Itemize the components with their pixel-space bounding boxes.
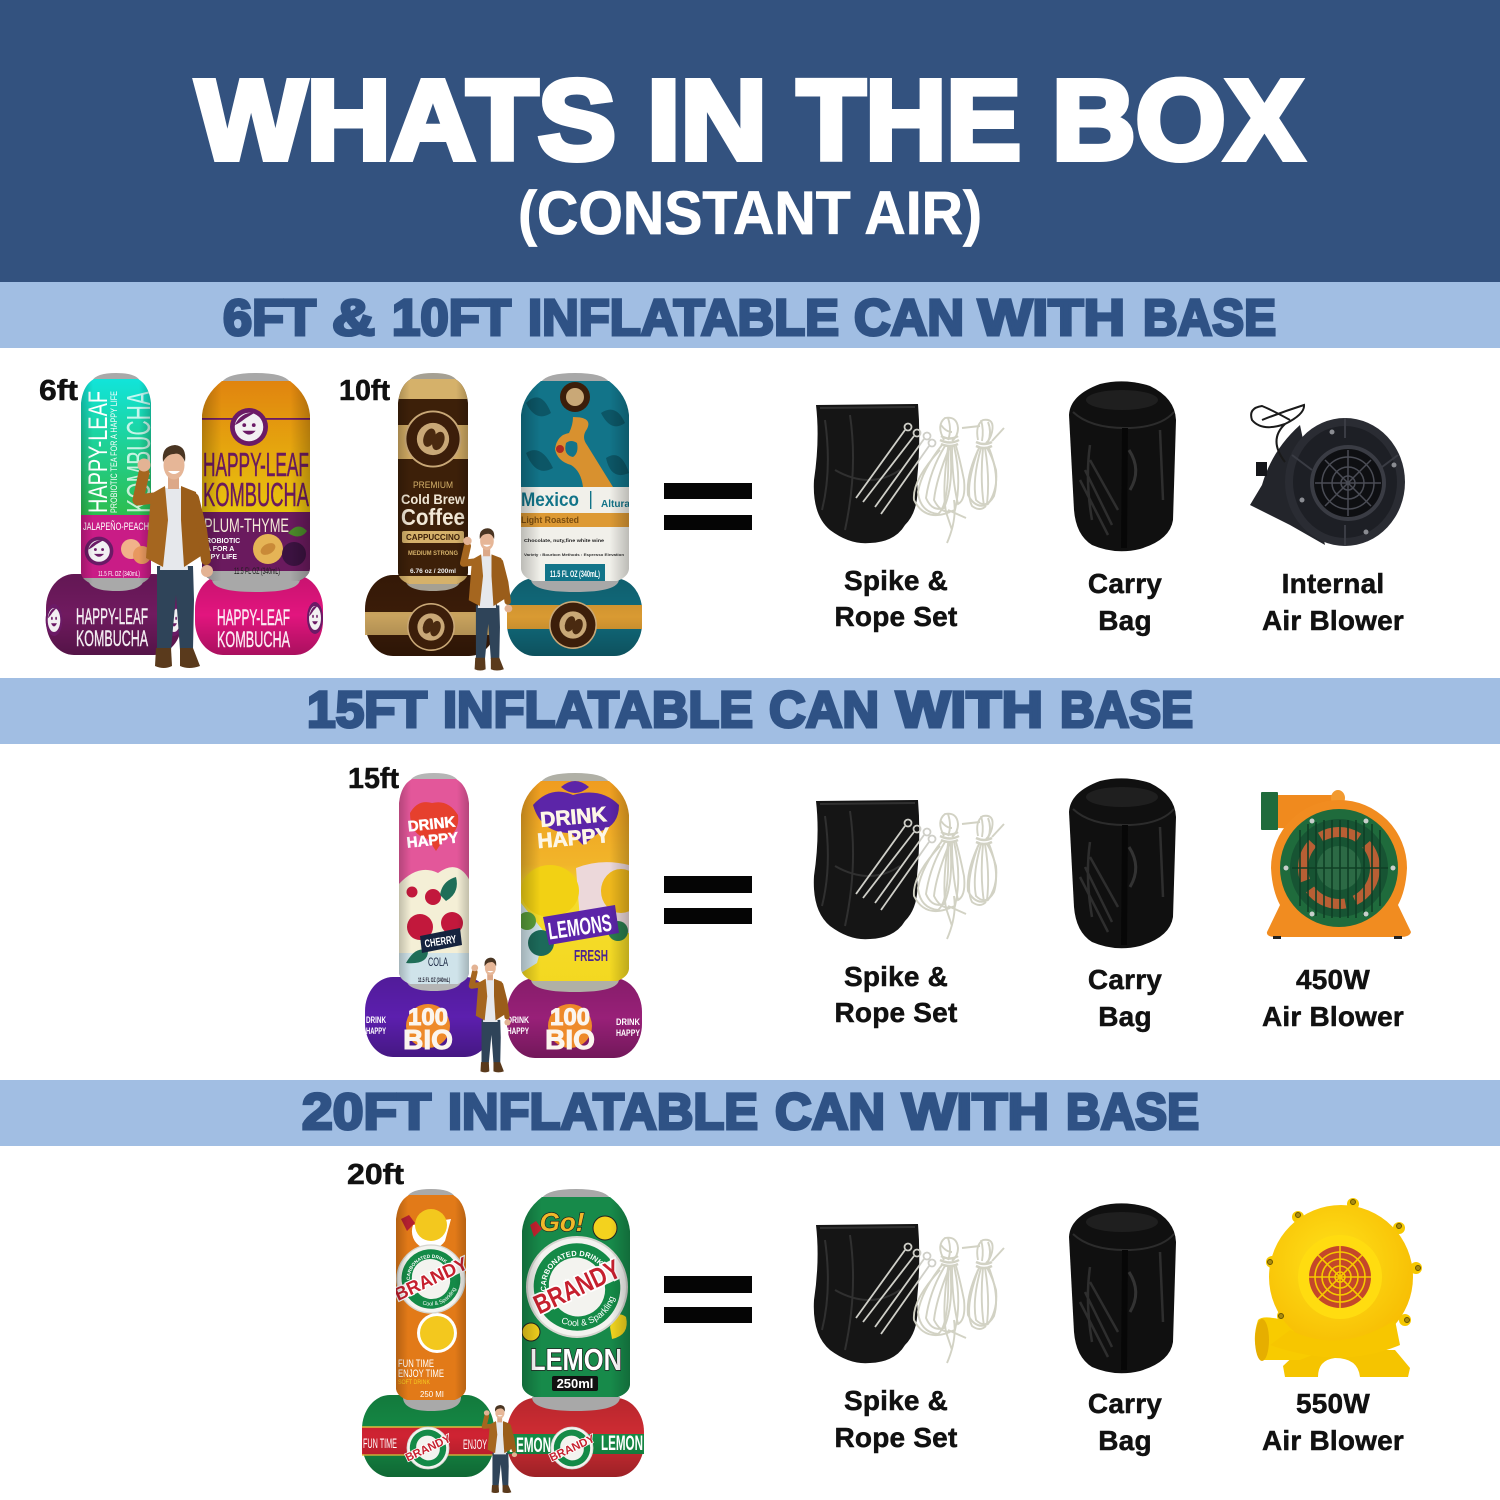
item: carry bag 2: [1069, 778, 1176, 948]
band: 20ft heading: INFLATABLE: [448, 1083, 758, 1140]
title: WHATS: [196, 57, 616, 183]
can: brandy lemon green: 250ml: [557, 1376, 593, 1391]
can: cold brew coffee: MEDIUM STRONG: [408, 550, 458, 557]
label: carry bag 3: Bag: [1098, 1425, 1152, 1456]
can: brandy lemon green: [522, 1189, 630, 1411]
title: BOX: [1052, 57, 1303, 183]
can: cold brew coffee: [397, 373, 469, 591]
can: cherry cola: [398, 773, 470, 991]
label: carry bag 1: Bag: [1098, 605, 1152, 636]
can: cold brew coffee: Coffee: [401, 504, 465, 530]
band: 6ft and 10ft heading: CAN: [854, 289, 964, 346]
title: [196, 57, 1303, 183]
can: brandy orange: BRANDY: [391, 1253, 471, 1305]
base: brown coffee: [365, 575, 497, 656]
band: 6ft and 10ft heading: BASE: [1143, 289, 1276, 346]
can: brandy orange: ENJOY TIME: [398, 1368, 444, 1380]
base: magenta 100 bio: HAPPY: [507, 1026, 529, 1036]
base: green brandy: ENJOY: [463, 1436, 487, 1452]
base: violet 100 bio: [365, 977, 493, 1057]
can: plum thyme: KOMBUCHA: [203, 476, 309, 513]
band: 15ft heading: BASE: [1060, 681, 1193, 738]
band: 15ft heading: 15FT: [307, 681, 427, 738]
label: spike and rope set 3: Rope Set: [835, 1422, 957, 1453]
band: 6ft and 10ft heading: INFLATABLE: [528, 289, 839, 346]
panel: 10ft cans: [339, 373, 642, 670]
label: internal air blower: Internal: [1282, 568, 1384, 599]
band: 20ft heading: [0, 1080, 1500, 1146]
label: 450W air blower: 450W: [1296, 964, 1370, 995]
base: magenta 100 bio: [507, 978, 642, 1058]
person: scale reference 10ft: [463, 528, 512, 670]
can: brandy lemon green: Go!: [540, 1207, 585, 1237]
can: plum thyme: PPY LIFE: [206, 554, 237, 561]
can: lemons fresh: LEMONS: [546, 910, 614, 945]
band: 15ft heading: WITH: [896, 681, 1043, 738]
item: spike and rope set 3: [814, 1224, 1004, 1363]
can: jalapeno peach: 11.5 FL OZ (340mL): [98, 569, 140, 578]
can: brandy orange: [396, 1189, 466, 1411]
can: cold brew coffee: CAPPUCCINO: [406, 533, 460, 542]
base: purple kombucha: KOMBUCHA: [76, 626, 148, 651]
can: brandy lemon green: CARBONATED DRINK: [540, 1250, 604, 1292]
can: lemons fresh: HAPPY: [536, 824, 610, 853]
band: 20ft heading: WITH: [902, 1083, 1049, 1140]
label: spike and rope set 3: Spike &: [844, 1385, 948, 1416]
can: brandy lemon green: Cool & Sparkling: [562, 1296, 616, 1326]
can: cold brew coffee: Cold Brew: [401, 491, 465, 507]
person: scale reference 15ft: [471, 958, 511, 1072]
can: cherry cola: CHERRY: [424, 934, 458, 950]
can: jalapeno peach: HAPPY-LEAF: [83, 391, 113, 513]
can: brandy lemon green: LEMON: [530, 1342, 622, 1377]
equals sign 3: [664, 1276, 752, 1323]
can: brandy orange: SOFT DRINK: [398, 1380, 430, 1386]
size label: 20ft: 20ft: [347, 1159, 404, 1191]
item: spike and rope set 2: [814, 800, 1004, 939]
band: 20ft heading: CAN: [775, 1083, 885, 1140]
base: purple kombucha: [46, 574, 182, 655]
can: brandy orange: CARBONATED DRINK: [406, 1254, 448, 1280]
band: 6ft and 10ft heading: 10FT: [392, 289, 511, 346]
label: 550W air blower: 550W: [1296, 1388, 1370, 1419]
can: cold brew coffee: PREMIUM: [413, 480, 453, 490]
band: 20ft heading: BASE: [1066, 1083, 1199, 1140]
title: THE: [797, 57, 1021, 183]
item: internal air blower: [1250, 405, 1405, 546]
can: plum thyme: 11.5 FL OZ (340mL): [234, 566, 280, 576]
base: pink kombucha: [195, 575, 323, 655]
can: cold brew coffee: 6.76 oz / 200ml: [410, 569, 456, 575]
base: magenta 100 bio: HAPPY: [616, 1028, 640, 1038]
can: cherry cola: HAPPY: [406, 829, 459, 852]
can: cherry cola: 11.5 FL OZ (340mL): [418, 978, 450, 984]
base: violet 100 bio: HAPPY: [366, 1026, 386, 1036]
base: red lemon: LEMON: [601, 1432, 643, 1455]
base: red lemon: LEMON: [509, 1434, 551, 1457]
title: IN: [647, 57, 767, 183]
base: violet 100 bio: 100: [408, 1004, 448, 1031]
base: pink kombucha: KOMBUCHA: [217, 627, 290, 652]
band: 20ft heading: 20FT: [302, 1083, 431, 1140]
base: red lemon: BRANDY: [548, 1433, 597, 1464]
label: carry bag 3: Carry: [1088, 1388, 1162, 1419]
can: lemons fresh: FRESH: [574, 948, 608, 965]
item: spike and rope set 1: [814, 404, 1004, 543]
can: lemons fresh: DRINK: [539, 803, 608, 832]
label: spike and rope set 1: Spike &: [844, 565, 948, 596]
can: jalapeno peach: PROBIOTIC TEA FOR A HAPPY LIFE: [109, 391, 119, 513]
can: mexico altura: Variety : Bourbon Methods : Espresso Elevation: [524, 552, 625, 557]
panel: 6ft cans: [39, 373, 323, 668]
can: cherry cola: COLA: [428, 955, 448, 969]
label: spike and rope set 2: Spike &: [844, 961, 948, 992]
band: 15ft heading: [0, 678, 1500, 744]
base: magenta 100 bio: 100: [550, 1004, 590, 1031]
base: magenta 100 bio: BIO: [545, 1024, 595, 1055]
base: green brandy: BRANDY: [404, 1433, 453, 1464]
can: cherry cola: DRINK: [407, 814, 456, 835]
can: jalapeno peach: JALAPEÑO-PEACH: [83, 520, 149, 533]
label: carry bag 2: Bag: [1098, 1001, 1152, 1032]
can: brandy orange: FUN TIME: [398, 1358, 434, 1370]
size label: 10ft: 10ft: [339, 375, 390, 407]
person: scale reference 20ft: [484, 1405, 517, 1493]
band: 15ft heading: CAN: [769, 681, 879, 738]
base: green brandy: [362, 1395, 494, 1477]
can: plum thyme: HAPPY-LEAF: [203, 446, 309, 483]
can: lemons fresh: 11.5 FL OZ (340mL): [549, 981, 601, 990]
item: 550W yellow air blower: [1255, 1198, 1422, 1377]
base: pink kombucha: HAPPY-LEAF: [217, 605, 290, 630]
header banner: [0, 0, 1500, 282]
can: jalapeno peach: [80, 373, 157, 591]
band: 6ft and 10ft heading: &: [332, 289, 375, 346]
can: plum thyme: ROBIOTIC: [206, 538, 240, 545]
size label: 15ft: 15ft: [348, 763, 399, 795]
can: brandy orange: 250 MI: [420, 1390, 444, 1399]
can: mexico altura: Altura: [601, 499, 630, 510]
can: jalapeno peach: KOMBUCHA: [120, 391, 157, 513]
label: carry bag 2: Carry: [1088, 964, 1162, 995]
label: carry bag 1: Carry: [1088, 568, 1162, 599]
band: 6ft and 10ft heading: WITH: [978, 289, 1125, 346]
can: brandy lemon green: BRANDY: [529, 1254, 625, 1320]
label: spike and rope set 1: Rope Set: [835, 601, 957, 632]
base: violet 100 bio: BIO: [403, 1024, 453, 1055]
panel: 20ft cans: [347, 1159, 644, 1493]
can: mexico altura: [521, 373, 630, 592]
base: teal coffee: [507, 578, 642, 656]
band: 6ft and 10ft heading: 6FT: [223, 289, 316, 346]
base: green brandy: FUN TIME: [363, 1435, 397, 1451]
equals sign 1: [664, 483, 752, 530]
can: lemons fresh: [521, 773, 629, 992]
label: 550W air blower: Air Blower: [1262, 1425, 1404, 1456]
item: carry bag 1: [1069, 381, 1176, 551]
label: spike and rope set 2: Rope Set: [835, 997, 957, 1028]
base: violet 100 bio: DRINK: [366, 1015, 386, 1025]
item: 450W orange air blower: [1261, 790, 1411, 939]
subtitle: (CONSTANT AIR): [518, 179, 982, 247]
can: mexico altura: Chocolate, nuty,fine white wine: [524, 538, 604, 544]
label: internal air blower: Air Blower: [1262, 605, 1404, 636]
equals sign 2: [664, 876, 752, 924]
size label: 6ft: 6ft: [39, 375, 78, 407]
can: mexico altura: 11.5 FL OZ (340mL): [550, 569, 600, 579]
base: red lemon: [507, 1398, 644, 1477]
can: plum thyme: A FOR A: [206, 546, 234, 553]
band: 15ft heading: INFLATABLE: [443, 681, 753, 738]
can: brandy orange: Cool & Sparkling: [422, 1288, 456, 1306]
base: purple kombucha: HAPPY-LEAF: [76, 604, 148, 629]
base: magenta 100 bio: DRINK: [616, 1017, 640, 1027]
can: plum thyme: PLUM-THYME: [204, 516, 289, 537]
person: scale reference 6ft: [138, 445, 213, 668]
can: mexico altura: Mexico: [521, 490, 579, 511]
base: magenta 100 bio: DRINK: [507, 1015, 529, 1025]
band: 6ft and 10ft heading: [0, 282, 1500, 348]
label: 450W air blower: Air Blower: [1262, 1001, 1404, 1032]
can: mexico altura: Light Roasted: [521, 515, 579, 525]
item: carry bag 3: [1069, 1203, 1176, 1373]
panel: 15ft cans: [348, 763, 642, 1072]
can: plum thyme: [202, 373, 310, 592]
